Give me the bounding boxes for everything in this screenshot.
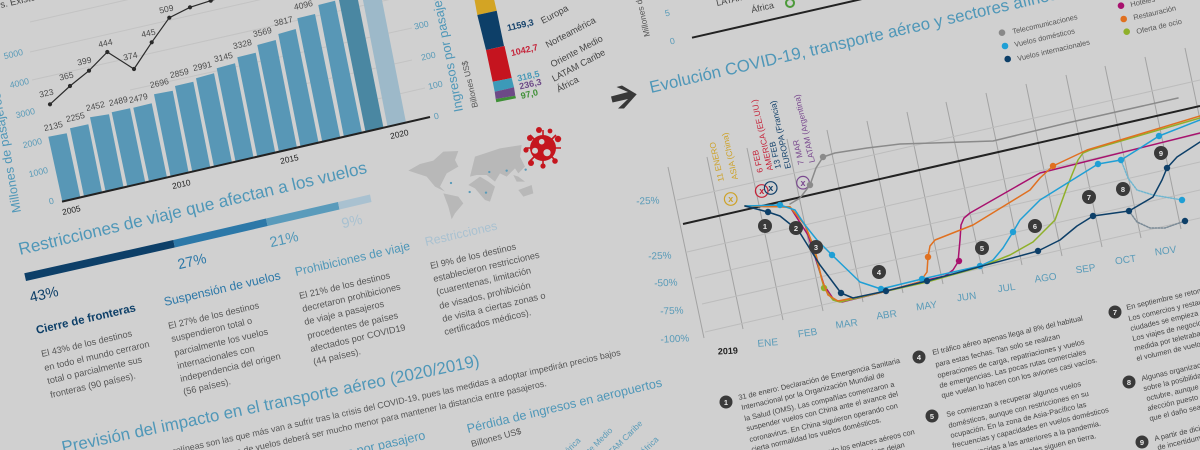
chart: passengers and revenue per passenger (0, 0, 466, 217)
curve: restaurants (745, 116, 1200, 301)
left axis: 4000 (9, 76, 30, 90)
bar values: 2859 (169, 66, 190, 80)
bar values: 2991 (192, 59, 213, 73)
column: other restrictions: Restricciones (424, 219, 499, 249)
note 7: 7 (1113, 308, 1117, 317)
airport regional labels (540, 418, 661, 450)
legend: Restauración (1132, 3, 1177, 22)
first-case date labels: AMERICA (EE.UU.) (749, 98, 775, 172)
column: flight suspension: El 27% de los destinos (167, 300, 260, 331)
note 5 (926, 379, 1110, 450)
line values: 445 (140, 27, 157, 40)
stacked bar values: 318,5 (516, 69, 540, 83)
line values: 444 (97, 37, 114, 50)
numbered chart badges: 4 (877, 268, 882, 277)
stacked bar region labels: LATAM Caribe (550, 47, 607, 84)
legend: Oferta de ocio (1135, 17, 1183, 36)
top-centre chart fragment: 0 (669, 36, 676, 47)
right axis: 200 (420, 50, 437, 63)
top-centre chart fragment: 5 (664, 8, 671, 19)
left axis: 1000 (28, 165, 49, 179)
column: flight suspension: suspendieron total o (170, 316, 253, 344)
stacked bar region labels (539, 3, 607, 94)
stacked bar region labels: Europa (539, 3, 571, 26)
left axis: 3000 (15, 106, 36, 120)
column: other restrictions (424, 219, 546, 337)
numbered chart badges: 7 (1087, 193, 1091, 202)
first-case date labels (707, 93, 817, 183)
first-case date labels: 7 MAR (790, 139, 806, 166)
line values: 374 (122, 50, 139, 63)
bar values: 3569 (252, 25, 273, 39)
column: travel bans: Prohibiciones de viaje (294, 239, 412, 279)
column: flight suspension (163, 268, 282, 397)
x axis labels: SEP (1075, 263, 1097, 276)
column: travel bans: procedentes de países (306, 310, 399, 341)
left axis: 2000 (22, 136, 43, 150)
bar values: 2135 (43, 119, 64, 133)
right axis (413, 19, 444, 122)
x axis years: 2010 (171, 177, 192, 191)
bar values: 2696 (149, 76, 170, 90)
column: border closures: fronteras (90 países). (49, 371, 137, 400)
bar values: 3328 (232, 37, 253, 51)
x axis labels: JUN (956, 291, 977, 304)
x axis labels: ABR (876, 309, 898, 322)
percentages: 43% (28, 284, 60, 306)
stacked bar values: 236,3 (518, 77, 542, 91)
first-case markers: x (728, 194, 733, 204)
right axis: 300 (413, 19, 430, 32)
x axis labels: AGO (1034, 272, 1058, 286)
column: travel bans: de viaje a pasajeros (303, 299, 385, 327)
note 1: 31 de enero: Declaración de Emergencia Sanitaria (737, 356, 902, 402)
first-case markers (724, 176, 809, 205)
note 4: para estas fechas. Tan solo se realizan (934, 331, 1061, 369)
note 1 (720, 356, 902, 450)
stacked bar values: 1159,3 (506, 17, 535, 33)
line chart: evolution (636, 48, 1200, 357)
curve: international flights (745, 142, 1200, 298)
column: other restrictions: El 9% de los destinos (429, 241, 517, 271)
y axis labels (636, 195, 690, 346)
note 8 (1122, 351, 1200, 423)
note 1: 1 (724, 398, 728, 407)
column: flight suspension: (56 países). (182, 376, 232, 397)
bar values: 2452 (85, 99, 106, 113)
line: revenue per passenger (48, 0, 232, 106)
note 5: domésticos, aunque con restricciones en su (947, 389, 1090, 430)
left axis (3, 47, 55, 207)
left axis: 5000 (3, 47, 24, 61)
restrictions heading: Restricciones de viaje que afectan a los vuelos (16, 157, 369, 259)
note 5: ocupación. En la zona de Asia-Pacífico las (949, 400, 1087, 440)
first-case date labels: ASIA (China) (719, 132, 740, 181)
column: border closures: en todo el mundo cerraron (43, 339, 150, 373)
restrictions share bar (24, 194, 372, 281)
first-case date labels: 6 FEB (750, 149, 765, 174)
legend: Telecomunicaciones (1011, 12, 1079, 36)
stacked bar values: 97,0 (520, 87, 539, 101)
note 4: que vuelan lo hacen con los aviones casi vacíos. (940, 355, 1098, 400)
column: border closures: total o parcialmente sus (46, 354, 143, 386)
stacked bar values: 1042,7 (510, 42, 539, 58)
percentages: 9% (340, 212, 364, 232)
legend: Vuelos internacionales (1016, 37, 1091, 63)
bar values: 3817 (273, 14, 294, 28)
note 9: 9 (1140, 438, 1144, 447)
stacked bar region labels: Norteamérica (544, 15, 598, 50)
bar values: 3145 (213, 50, 234, 64)
y axis labels: -25% (648, 250, 672, 263)
note 4: operaciones de carga, repatriaciones y vuelos (936, 337, 1086, 380)
column: other restrictions: de visita a ciertas zonas o (441, 290, 546, 324)
stacked bar region labels: África (555, 74, 581, 94)
x axis years: 2015 (279, 152, 300, 166)
column: border closures: El 43% de los destinos (40, 328, 133, 359)
note 1: Internacional por la Organización Mundial de (740, 370, 885, 412)
curve: hotels (745, 133, 1200, 302)
legend: Vuelos domésticos (1013, 26, 1076, 49)
x axis labels: ENE (757, 337, 779, 350)
note 8: 8 (1127, 378, 1131, 387)
y axis labels: -50% (654, 277, 678, 290)
x axis years: 2005 (61, 203, 82, 217)
panel: impact forecast (60, 347, 663, 450)
icon: world map (408, 145, 533, 219)
column: flight suspension: independencia del origen (179, 351, 282, 384)
column: flight suspension: parcialmente los vuelos (173, 327, 269, 358)
notes: timeline text (720, 272, 1200, 450)
stacked bar: regional losses (474, 0, 516, 102)
icon: arrow (611, 86, 637, 108)
line values: 323 (38, 87, 55, 100)
note 4: de emergencias. Las pocas rutas comerciales (938, 347, 1087, 390)
curve: domestic flights (745, 120, 1200, 292)
right axis: 0 (433, 111, 440, 122)
column: travel bans: (44 países). (312, 346, 362, 367)
zero line (683, 106, 1200, 224)
note 4: 4 (917, 353, 922, 362)
x axis labels: MAY (916, 300, 938, 313)
line values: 399 (76, 55, 93, 68)
numbered chart badges (758, 146, 1168, 279)
column: travel bans: afectados por COVID19 (309, 322, 406, 354)
numbered chart badges: 2 (794, 224, 798, 233)
y axis labels: -75% (660, 305, 684, 318)
top-centre chart fragment: África (750, 0, 775, 15)
first-case markers: x (800, 178, 806, 188)
note 5: Se comienzan a recuperar algunos vuelos (945, 379, 1082, 419)
note 7 (1108, 272, 1200, 363)
y axis labels: -100% (660, 333, 690, 346)
column: flight suspension: internacionales con (176, 343, 256, 371)
first-case date labels: 13 FEB (767, 140, 783, 170)
x axis labels: JUL (997, 282, 1017, 295)
line values (38, 3, 175, 100)
icon: virus (523, 127, 561, 169)
note 5: frecuencias y capacidades en vuelos domésticos (951, 405, 1110, 450)
column: other restrictions: certificados médicos). (443, 307, 532, 337)
stacked bar values (506, 17, 542, 101)
column: border closures (35, 302, 150, 400)
percentages (28, 212, 364, 306)
stacked bar region labels: Oriente Medio (549, 33, 604, 69)
note 5: 5 (930, 412, 934, 421)
bar values (43, 0, 314, 133)
percentages: 21% (268, 229, 300, 251)
x axis labels: MAR (835, 318, 858, 332)
note 9 (1136, 409, 1200, 450)
percentages: 27% (176, 251, 208, 273)
first-case markers: x (759, 186, 764, 196)
numbered chart badges: 9 (1159, 149, 1163, 158)
bar values: 2489 (108, 94, 129, 108)
note 1: la Salud (OMS). Las compañías comenzaron a (743, 379, 896, 423)
x axis labels: NOV (1154, 245, 1177, 258)
x axis labels: 2019 (718, 345, 738, 357)
note 4: El tráfico aéreo apenas llega al 8% del habitual (931, 313, 1084, 357)
first-case markers: x (768, 183, 773, 193)
airport unit: Billones US$ (470, 426, 522, 449)
grid (668, 48, 1200, 338)
legend (999, 0, 1183, 63)
left axis: 0 (48, 196, 55, 207)
first-case date labels: 11 ENERO (707, 141, 726, 183)
bars: passengers 2005-2020 (48, 0, 406, 201)
top-centre chart fragment (624, 0, 862, 47)
numbered chart badges: 3 (814, 243, 818, 252)
stacked bar unit label: Billones US$ (459, 59, 480, 109)
panel: travel restrictions (16, 157, 546, 400)
numbered chart badges: 1 (763, 222, 767, 231)
curve: leisure (745, 118, 1200, 302)
first-case date labels: EUROPA (Francia) (768, 100, 793, 170)
note 1: coronavirus. En China siguieron operando con (748, 401, 899, 444)
x axis labels (718, 245, 1177, 357)
line values: 365 (58, 70, 75, 83)
column: travel bans: El 21% de los destinos (298, 270, 391, 301)
numbered chart badges: 6 (1033, 222, 1037, 231)
subheading: airport losses: Pérdida de ingresos en aeropuertos (465, 376, 663, 436)
column: border closures: Cierre de fronteras (35, 302, 137, 337)
x axis years: 2020 (389, 127, 410, 141)
first-case date labels: LATAM (Argentina) (791, 93, 817, 164)
note 1: suspender vuelos con China ante el avance del (745, 389, 899, 433)
note 4 (912, 313, 1098, 400)
x axis labels: FEB (797, 327, 818, 340)
right axis: 100 (427, 79, 444, 92)
column: flight suspension: Suspensión de vuelos (163, 268, 282, 309)
bar values: 2255 (65, 110, 86, 124)
x axis labels: OCT (1114, 254, 1137, 267)
y axis labels: -25% (636, 195, 660, 208)
numbered chart badges: 5 (980, 244, 984, 253)
column: other restrictions: de visados, prohibición (438, 280, 532, 311)
curve: telecommunications (790, 98, 1178, 204)
column: travel bans (294, 239, 412, 367)
numbered chart badges: 8 (1121, 185, 1125, 194)
line values: 509 (158, 3, 175, 16)
column: other restrictions: establecieron restricciones (432, 250, 541, 284)
bar values: 2479 (128, 91, 149, 105)
column: other restrictions: (cuarentenas, limitación (435, 265, 532, 297)
baseline (62, 117, 430, 202)
x axis years (61, 127, 410, 217)
column: travel bans: decretaron prohibiciones (301, 281, 402, 314)
